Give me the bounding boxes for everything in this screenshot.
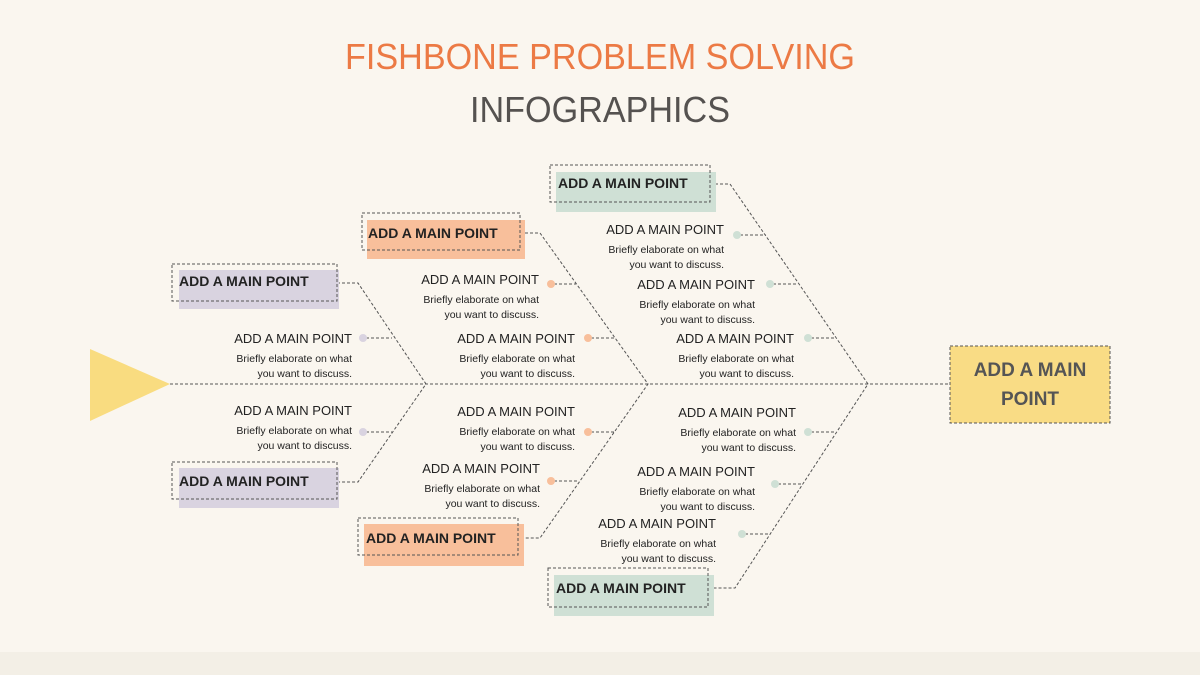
sub points: you want to discuss.	[660, 314, 755, 326]
sub points: you want to discuss.	[257, 368, 352, 380]
head box: main problem	[950, 346, 1110, 423]
sub points	[234, 222, 812, 565]
sub points: Briefly elaborate on what	[608, 244, 724, 256]
sub points: Briefly elaborate on what	[680, 427, 796, 439]
sub points: Briefly elaborate on what	[459, 353, 575, 365]
title: INFOGRAPHICS	[470, 89, 730, 130]
box: orange top	[362, 213, 525, 259]
head box: main problem: POINT	[1001, 389, 1059, 410]
sub points: ADD A MAIN POINT	[457, 404, 575, 419]
bones lines	[337, 184, 868, 588]
sub points: Briefly elaborate on what	[639, 486, 755, 498]
sub points: you want to discuss.	[445, 498, 540, 510]
sub points: you want to discuss.	[444, 309, 539, 321]
sub points: Briefly elaborate on what	[424, 483, 540, 495]
sub points: you want to discuss.	[480, 441, 575, 453]
sub points: you want to discuss.	[480, 368, 575, 380]
sub points: Briefly elaborate on what	[236, 353, 352, 365]
box: purple top	[172, 264, 339, 309]
sub points: you want to discuss.	[629, 259, 724, 271]
sub points: Briefly elaborate on what	[236, 425, 352, 437]
sub points: ADD A MAIN POINT	[422, 461, 540, 476]
sub points: ADD A MAIN POINT	[678, 405, 796, 420]
sub points: Briefly elaborate on what	[600, 538, 716, 550]
box: orange bottom: ADD A MAIN POINT	[366, 530, 496, 546]
title: FISHBONE PROBLEM SOLVING	[345, 36, 855, 77]
sub points: you want to discuss.	[701, 442, 796, 454]
sub points: ADD A MAIN POINT	[421, 272, 539, 287]
box: orange top: ADD A MAIN POINT	[368, 225, 498, 241]
sub points: you want to discuss.	[257, 440, 352, 452]
sub points: ADD A MAIN POINT	[676, 331, 794, 346]
sub points: ADD A MAIN POINT	[637, 464, 755, 479]
sub points: Briefly elaborate on what	[423, 294, 539, 306]
sub points: ADD A MAIN POINT	[606, 222, 724, 237]
head box: main problem: ADD A MAIN	[974, 360, 1086, 381]
sub points: ADD A MAIN POINT	[637, 277, 755, 292]
box: purple top: ADD A MAIN POINT	[179, 273, 309, 289]
box: orange bottom	[358, 518, 524, 566]
sub points: ADD A MAIN POINT	[457, 331, 575, 346]
sub points: you want to discuss.	[621, 553, 716, 565]
box: green bottom	[548, 568, 714, 616]
sub points: ADD A MAIN POINT	[234, 403, 352, 418]
box: green bottom: ADD A MAIN POINT	[556, 580, 686, 596]
sub points: Briefly elaborate on what	[459, 426, 575, 438]
title	[345, 36, 855, 130]
box: purple bottom	[172, 462, 339, 508]
sub points: ADD A MAIN POINT	[234, 331, 352, 346]
icon: fish tail triangle	[90, 349, 170, 421]
sub points: you want to discuss.	[699, 368, 794, 380]
sub points: Briefly elaborate on what	[639, 299, 755, 311]
sub points: Briefly elaborate on what	[678, 353, 794, 365]
box: green top	[550, 165, 716, 212]
sub points: ADD A MAIN POINT	[598, 516, 716, 531]
sub points: you want to discuss.	[660, 501, 755, 513]
box: green top: ADD A MAIN POINT	[558, 175, 688, 191]
box: purple bottom: ADD A MAIN POINT	[179, 473, 309, 489]
spine line	[170, 383, 950, 385]
